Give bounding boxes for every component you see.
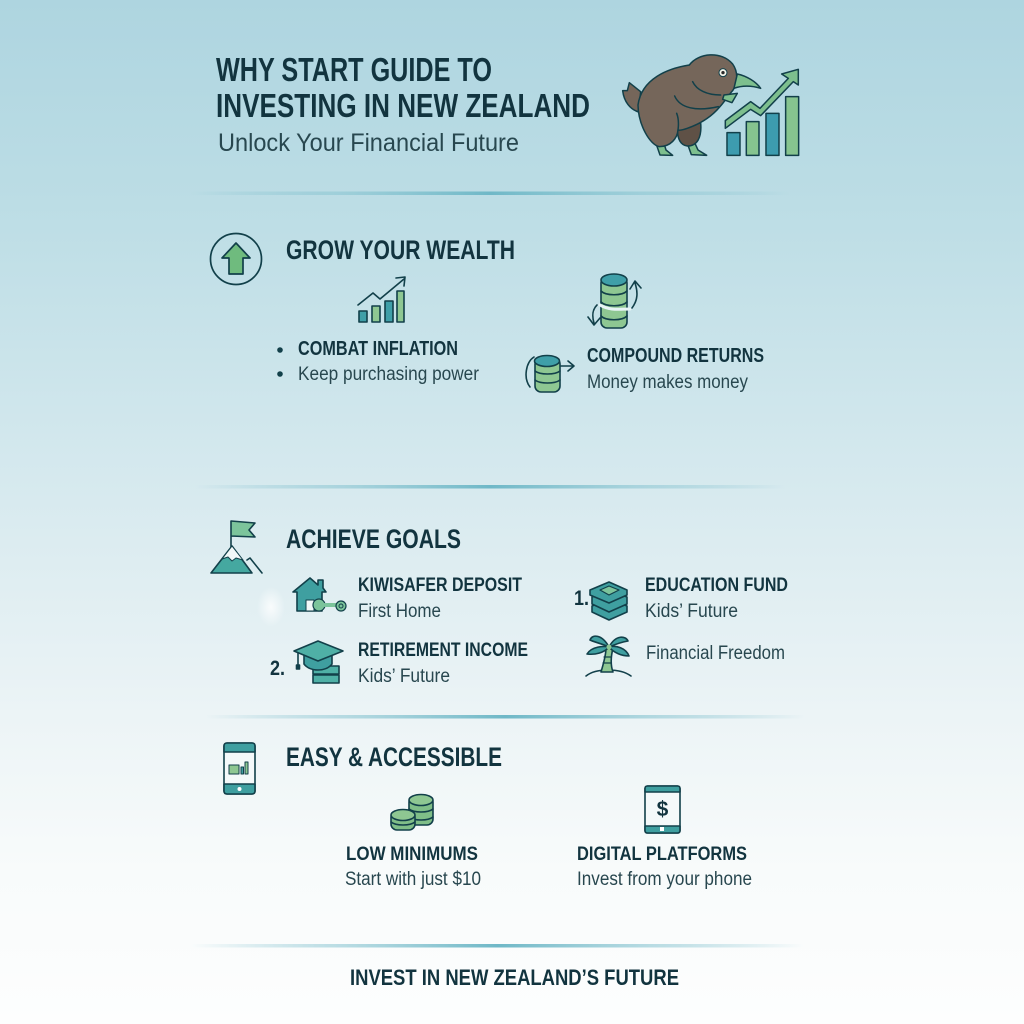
icon: coin stack with cycle arrows (588, 274, 641, 328)
item: low minimums: LOW MINIMUMS (346, 844, 478, 865)
item: low minimums (345, 844, 481, 890)
heading: GROW YOUR WEALTH (286, 235, 515, 265)
item: education fund (645, 575, 788, 622)
heading: ACHIEVE GOALS (286, 524, 461, 554)
item: kiwisafer deposit: First Home (358, 601, 441, 622)
title: INVESTING IN NEW ZEALAND (216, 87, 590, 124)
item: digital platforms: Invest from your phone (577, 869, 752, 890)
panel: easy and accessible (224, 742, 752, 890)
icon: up arrow in circle (210, 234, 262, 284)
bullet: keep purchasing power: Keep purchasing power (298, 364, 480, 385)
item: kiwisafer deposit (358, 575, 522, 622)
number 2: 2. (270, 657, 285, 680)
panel: grow your wealth (210, 234, 764, 393)
icon: graduation cap on books (294, 641, 343, 683)
item: low minimums: Start with just $10 (345, 869, 481, 890)
icon: coin stack with forward arrow (526, 356, 574, 392)
header (216, 51, 799, 157)
icon: coin stacks (391, 794, 433, 830)
item: retirement income: RETIREMENT INCOME (358, 640, 528, 661)
item: education fund: Kids’ Future (645, 601, 738, 622)
item: digital platforms (577, 844, 752, 890)
icon: small growth chart (358, 277, 405, 322)
bullet: combat inflation: COMBAT INFLATION (298, 338, 458, 360)
number 1: 1. (574, 587, 589, 610)
subtitle: Unlock Your Financial Future (218, 129, 519, 157)
icon: palm tree on island (586, 636, 631, 676)
icon: house with key (293, 578, 346, 611)
text: compound returns: Money makes money (587, 372, 748, 393)
icon: phone with chart (224, 743, 255, 794)
text: compound returns: COMPOUND RETURNS (587, 345, 764, 367)
item: education fund: EDUCATION FUND (645, 575, 788, 596)
item: digital platforms: DIGITAL PLATFORMS (577, 844, 747, 865)
panel: achieve goals (211, 521, 788, 687)
title: WHY START GUIDE TO (216, 51, 492, 88)
title (216, 51, 590, 124)
heading: EASY & ACCESSIBLE (286, 742, 502, 772)
icon: mountain with flag (211, 521, 262, 573)
icon: stack of books (590, 582, 627, 620)
item: retirement income: Kids’ Future (358, 666, 450, 687)
item: retirement income (358, 640, 528, 687)
icon: kiwi bird with rising bar chart (623, 55, 799, 155)
icon: tablet with dollar sign: $ (657, 798, 669, 821)
footer tagline: INVEST IN NEW ZEALAND’S FUTURE (350, 965, 679, 990)
text: compound returns (587, 345, 764, 393)
item: financial freedom: Financial Freedom (646, 643, 785, 664)
icon: tablet with dollar sign (645, 786, 680, 833)
item: kiwisafer deposit: KIWISAFER DEPOSIT (358, 575, 522, 596)
